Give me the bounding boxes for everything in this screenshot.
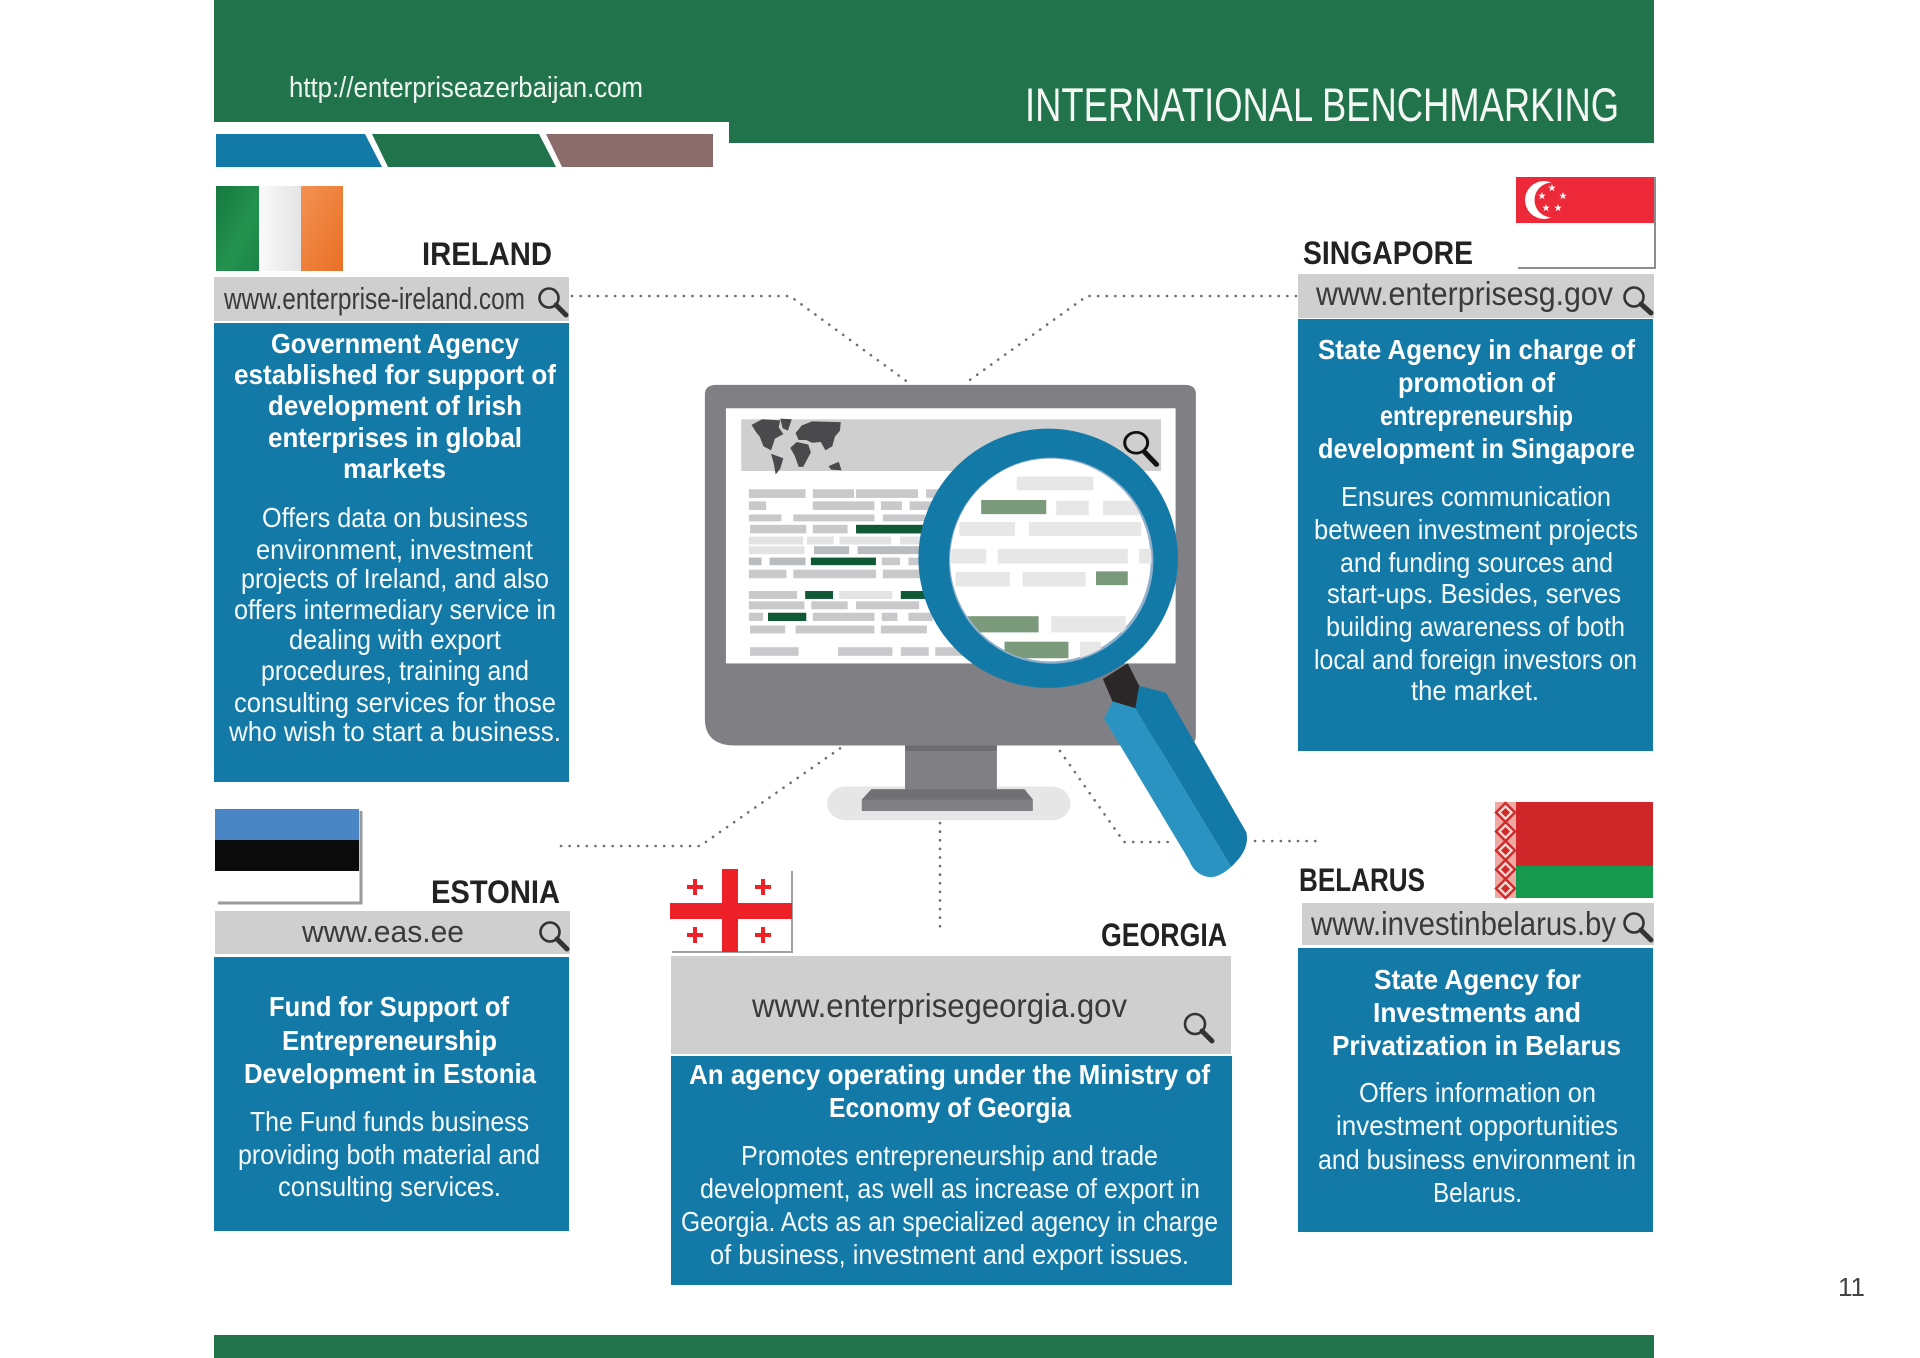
tricolour strip — [216, 134, 713, 167]
heading: Singapore: SINGAPORE — [1303, 235, 1473, 271]
description box: Ireland: who wish to start a business. — [228, 716, 561, 747]
description box: Singapore — [1298, 319, 1653, 751]
description box: Georgia: of business, investment and export issues. — [710, 1239, 1189, 1270]
icon: search — [1624, 914, 1651, 940]
description box: Estonia: providing both material and — [238, 1139, 540, 1170]
description box: Estonia: The Fund funds business — [250, 1106, 529, 1137]
description box: Belarus: Belarus. — [1433, 1177, 1522, 1208]
description box: Georgia: An agency operating under the Ministry of — [689, 1059, 1211, 1090]
description box: Estonia — [214, 957, 569, 1231]
description box: Belarus: and business environment in — [1318, 1144, 1636, 1175]
flag: Georgia — [670, 869, 792, 952]
flag: Singapore — [1516, 177, 1655, 268]
panel: Georgia — [670, 869, 1232, 1285]
url bar: Estonia: www.eas.ee — [301, 914, 464, 949]
monitor stand shadow — [827, 787, 1070, 820]
description box: Estonia: consulting services. — [278, 1171, 501, 1202]
footer band — [214, 1335, 1654, 1358]
description box: Ireland: procedures, training and — [261, 655, 529, 686]
magnifying glass handle — [1103, 663, 1247, 877]
url bar: Georgia — [671, 956, 1231, 1054]
monitor screen — [726, 408, 1176, 663]
magnifying glass lens — [918, 429, 1178, 688]
page title: INTERNATIONAL BENCHMARKING — [1025, 78, 1619, 131]
description box: Georgia — [671, 1056, 1232, 1285]
description box: Singapore: start-ups. Besides, serves — [1327, 578, 1621, 609]
description box: Ireland: dealing with export — [289, 624, 501, 655]
description box: Ireland: markets — [343, 453, 446, 484]
monitor stand — [862, 743, 1033, 811]
description box: Estonia: Development in Estonia — [244, 1058, 536, 1089]
description box: Ireland: Government Agency — [271, 328, 519, 359]
description box: Georgia: Georgia. Acts as an specialized agency in charge — [681, 1206, 1218, 1237]
panel: Belarus — [1298, 802, 1654, 1232]
icon: search — [1624, 288, 1651, 313]
heading: Georgia: GEORGIA — [1101, 917, 1227, 953]
description box: Georgia: development, as well as increase of export in — [700, 1173, 1200, 1204]
url bar: Georgia: www.enterprisegeorgia.gov — [751, 987, 1127, 1024]
description box: Ireland: projects of Ireland, and also — [241, 563, 549, 594]
connector dotted lines — [561, 296, 1318, 933]
magnified rows — [948, 477, 1155, 658]
description box: Ireland: enterprises in global — [268, 422, 522, 453]
description box: Estonia: Fund for Support of — [269, 991, 510, 1022]
description box: Belarus: Offers information on — [1359, 1077, 1596, 1108]
description box: Ireland: established for support of — [234, 359, 557, 390]
page number: 11 — [1838, 1272, 1865, 1302]
description box: Singapore: Ensures communication — [1341, 481, 1611, 512]
icon: search — [540, 288, 566, 315]
description box: Singapore: and funding sources and — [1340, 547, 1613, 578]
url bar: Ireland: www.enterprise-ireland.com — [223, 281, 525, 316]
flag: Belarus — [1495, 802, 1653, 898]
description box: Singapore: building awareness of both — [1326, 611, 1625, 642]
panel: Ireland — [214, 186, 569, 782]
description box: Ireland — [214, 323, 569, 782]
panel: Singapore — [1298, 177, 1655, 751]
description box: Singapore: between investment projects — [1314, 514, 1638, 545]
header band — [214, 0, 1654, 143]
central illustration: monitor with magnifying glass — [705, 385, 1247, 877]
description box: Belarus: Privatization in Belarus — [1332, 1030, 1621, 1061]
icon: search — [540, 922, 567, 949]
description box: Singapore: State Agency in charge of — [1318, 334, 1636, 365]
search band — [741, 419, 1161, 471]
screen search icon — [1125, 432, 1156, 464]
description box: Georgia: Promotes entrepreneurship and trade — [741, 1140, 1158, 1171]
description box: Ireland: Offers data on business — [262, 502, 528, 533]
flag: Ireland — [216, 186, 343, 271]
description box: Singapore: development in Singapore — [1318, 433, 1635, 464]
url bar: Belarus: www.investinbelarus.by — [1310, 905, 1616, 942]
heading: Estonia: ESTONIA — [431, 874, 560, 910]
heading: Belarus: BELARUS — [1299, 862, 1425, 898]
description box: Estonia: Entrepreneurship — [282, 1025, 497, 1056]
url bar: Singapore: www.enterprisesg.gov — [1315, 275, 1613, 312]
description box: Georgia: Economy of Georgia — [829, 1092, 1071, 1123]
heading: Ireland: IRELAND — [422, 236, 552, 272]
world map — [752, 419, 841, 474]
description box: Belarus — [1298, 948, 1653, 1232]
description box: Ireland: consulting services for those — [234, 687, 556, 718]
description box: Belarus: investment opportunities — [1336, 1110, 1618, 1141]
description box: Ireland: offers intermediary service in — [234, 594, 556, 625]
description box: Ireland: development of Irish — [268, 390, 522, 421]
flag: Estonia — [215, 809, 361, 903]
icon: search — [1185, 1014, 1212, 1041]
header url: http://enterpriseazerbaijan.com — [289, 72, 643, 104]
description box: Singapore: promotion of — [1398, 367, 1556, 398]
description box: Ireland: environment, investment — [256, 534, 533, 565]
url bar: Estonia — [215, 911, 570, 954]
description box: Belarus: Investments and — [1373, 997, 1581, 1028]
panel: Estonia — [214, 809, 570, 1231]
monitor body — [705, 385, 1196, 745]
description box: Singapore: the market. — [1411, 675, 1539, 706]
description box: Singapore: local and foreign investors on — [1314, 644, 1637, 675]
table rows — [749, 489, 986, 656]
description box: Belarus: State Agency for — [1374, 964, 1581, 995]
description box: Singapore: entrepreneurship — [1380, 400, 1573, 431]
